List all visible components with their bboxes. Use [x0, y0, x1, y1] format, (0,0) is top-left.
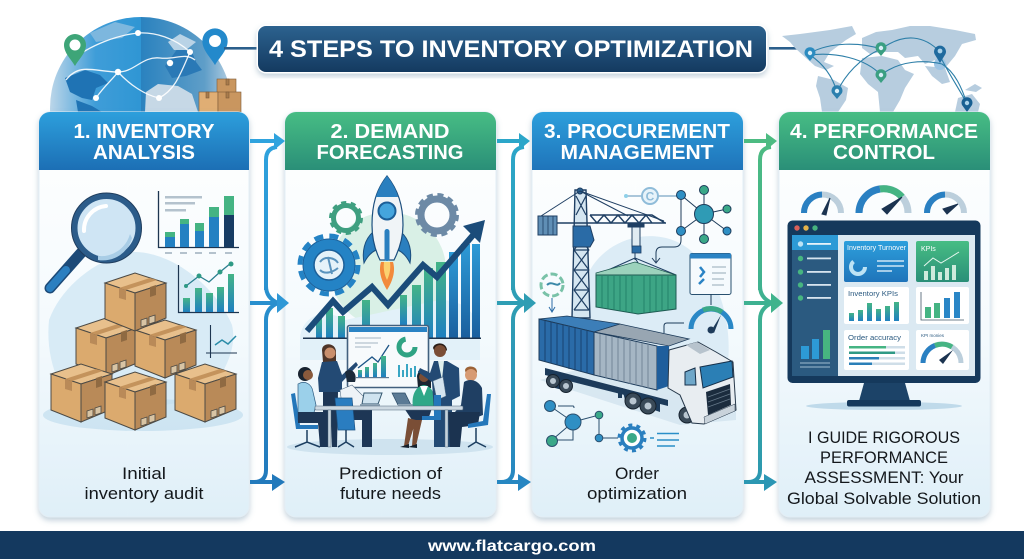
panel 1 header: 1. INVENTORY: [74, 121, 215, 143]
seated woman green: [400, 370, 435, 448]
people in meeting: [291, 343, 491, 448]
caption: Global Solvable Solution: [787, 489, 981, 508]
card: small document: [690, 254, 731, 294]
icon: recycle circle: [541, 274, 563, 312]
caption: [787, 428, 981, 508]
panel: 4 performance control: [779, 112, 990, 517]
panel 2 header: 2. DEMAND: [330, 121, 450, 143]
caption: future needs: [340, 484, 441, 503]
card: KPI monies gauge: KPI monies: [921, 333, 945, 338]
panel 3 header: MANAGEMENT: [560, 142, 714, 164]
card: order accuracy: Order accuracy: [848, 335, 902, 342]
icon: cardboard boxes on globe: [199, 79, 241, 112]
panel 1 header: [39, 112, 249, 170]
gauge right: [927, 194, 964, 214]
footer url: www.flatcargo.com: [427, 538, 596, 555]
icon: bottom network and gear: [544, 400, 679, 451]
caption: inventory audit: [84, 484, 204, 503]
arrow: growth trend: [307, 220, 485, 331]
monitor dashboard: [788, 220, 980, 383]
connector: globe to title: [224, 47, 260, 50]
panel: 1 inventory analysis: [39, 112, 249, 517]
window dots: [794, 225, 818, 231]
caption: [339, 464, 442, 503]
meeting floor shadow: [287, 439, 493, 455]
seated woman left: [298, 367, 327, 447]
chair right: [468, 394, 491, 447]
caption: [84, 464, 204, 503]
card: inventory turnover: Inventory Turnover: [847, 245, 907, 252]
title banner: [256, 24, 768, 74]
backdrop cloud: [300, 300, 480, 360]
panel 4 header: [779, 112, 990, 170]
caption: PERFORMANCE: [820, 448, 948, 467]
globe illustration: [50, 17, 242, 112]
card: inventory turnover: [844, 241, 908, 282]
chair left: [291, 393, 320, 447]
gauge left: [804, 194, 841, 215]
sidebar: [792, 235, 838, 376]
world map illustration: [782, 26, 982, 112]
caption: Initial: [122, 464, 166, 483]
panel 4 header: 4. PERFORMANCE: [790, 121, 978, 143]
panel 2 header: FORECASTING: [316, 142, 464, 164]
icon: rocket: [363, 176, 411, 290]
icon: green gear: [331, 203, 361, 233]
monitor stand: [806, 383, 962, 410]
caption: [587, 464, 687, 503]
combo chart: bars and line: [178, 262, 239, 312]
footer bar: [0, 531, 1024, 559]
card: order accuracy: [844, 330, 909, 370]
icon: blue gear: [300, 236, 358, 294]
standing man with tablet: [418, 343, 460, 447]
title text: 4 STEPS TO INVENTORY OPTIMIZATION: [269, 36, 753, 63]
caption: Prediction of: [339, 464, 442, 483]
gauge centre: [859, 188, 908, 214]
caption: Order: [615, 464, 659, 483]
caption: I GUIDE RIGOROUS: [808, 428, 960, 447]
chair center right: [422, 395, 441, 420]
laptop right: [392, 393, 416, 406]
man from behind with chair: [335, 370, 375, 447]
icon: gauge: [664, 294, 731, 334]
icon: copyright node: C: [646, 190, 655, 204]
panel 3 header: [532, 112, 743, 170]
laptop left: [360, 393, 382, 406]
panel 4 header: CONTROL: [833, 142, 935, 164]
standing woman: [318, 344, 358, 447]
caption: ASSESSMENT: Your: [804, 468, 964, 487]
panel 3 header: 3. PROCUREMENT: [544, 121, 730, 143]
arrows: step 2 to step 3: [497, 133, 536, 491]
seated man right: [448, 366, 483, 447]
caption: optimization: [587, 484, 687, 503]
illustration: container truck: [539, 316, 736, 424]
icon: magnifying glass: [50, 193, 142, 288]
card: KPIs: KPIs: [921, 246, 936, 253]
meeting table: [315, 406, 463, 447]
icon: copyright node: [624, 188, 681, 204]
icon: grey gear: [417, 195, 457, 235]
panel 2 header: [285, 112, 496, 170]
card: KPI monies gauge: [916, 330, 969, 370]
backdrop blob: [590, 236, 729, 380]
arrows: step 3 to step 4: [744, 133, 783, 491]
icon: stack of cardboard boxes: [43, 273, 243, 431]
bar chart behind arrow: [303, 244, 481, 339]
icon: blue location pin: [202, 28, 228, 65]
connector: title to map: [769, 47, 799, 50]
mini line chart: [206, 325, 237, 358]
panel: 3 procurement management: [532, 112, 743, 517]
icon: network hub: [652, 186, 731, 263]
icon: green location pin: [64, 34, 86, 66]
card: inventory KPIs: Inventory KPIs: [848, 291, 899, 298]
bar chart: stacked bars: [158, 191, 239, 253]
card: inventory KPIs: [844, 287, 909, 324]
arrows: step 1 to step 2: [250, 133, 289, 491]
ground shadow: [540, 352, 736, 425]
illustration: green container: [596, 262, 676, 314]
panel 1 header: ANALYSIS: [93, 142, 195, 164]
backdrop blob: [48, 252, 233, 415]
whiteboard with charts: [348, 326, 428, 388]
illustration: tower crane: [538, 188, 676, 318]
card: bar chart: [916, 287, 969, 324]
backdrop blob: [330, 212, 446, 328]
panel: 2 demand forecasting: [285, 112, 496, 517]
card: KPIs: [916, 241, 969, 282]
